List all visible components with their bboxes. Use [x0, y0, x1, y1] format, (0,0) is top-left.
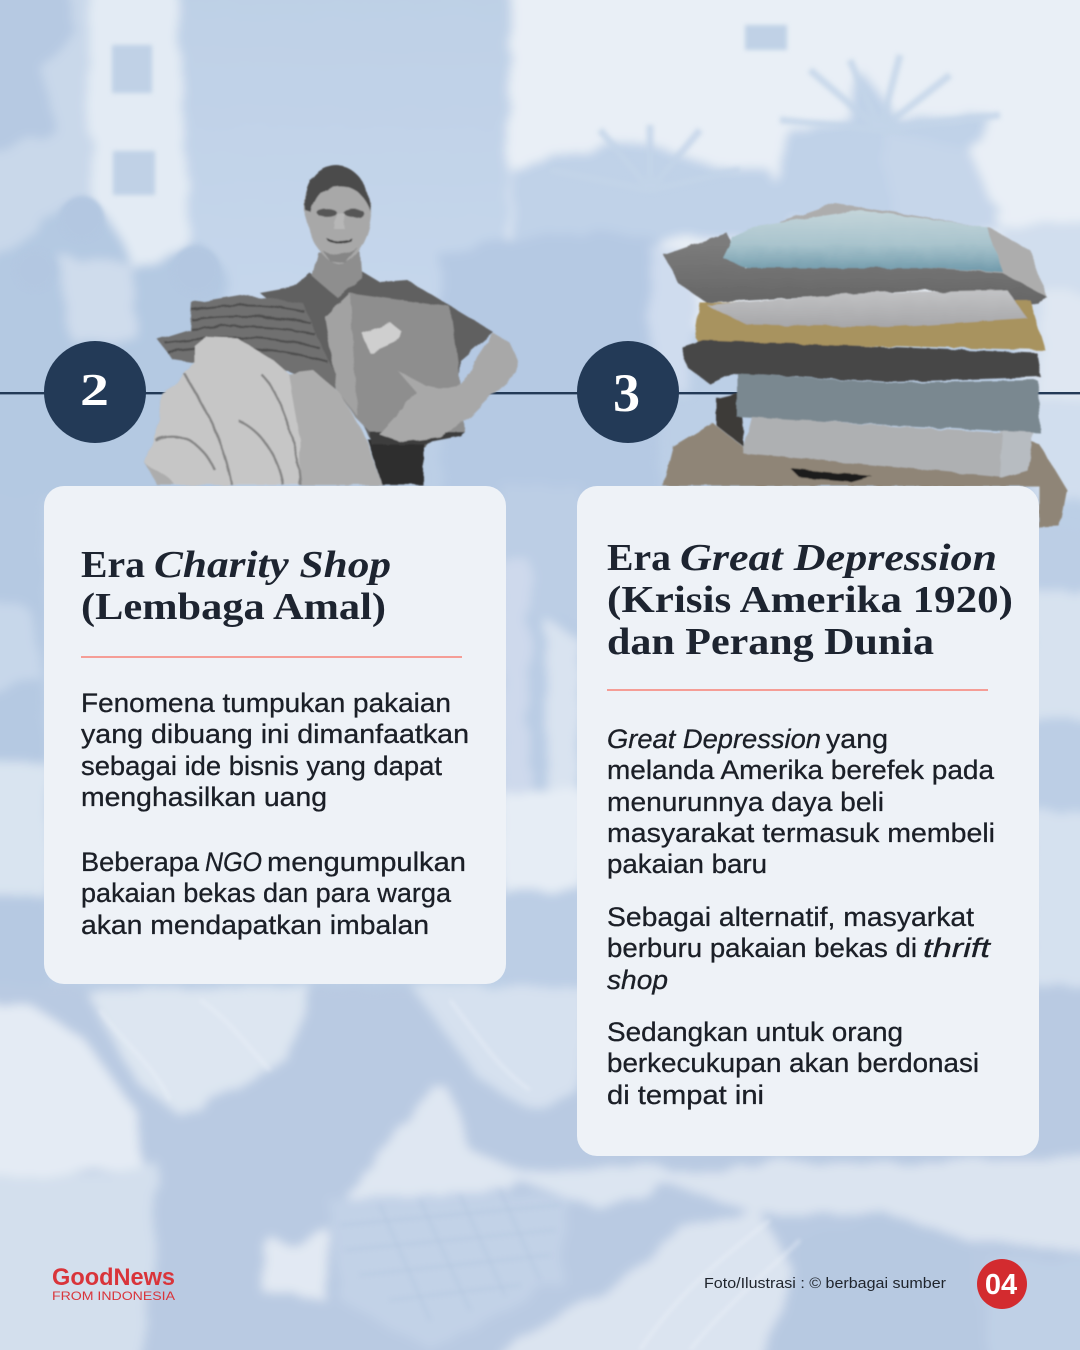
paragraph one: masyarakat termasuk membeli	[607, 818, 995, 848]
number badge 3: 3	[613, 363, 640, 423]
tan layer	[695, 300, 1045, 350]
paragraph two: Beberapa	[81, 847, 200, 877]
palm left	[0, 0, 75, 150]
blue-grey denim	[737, 373, 1040, 433]
heading: (Lembaga Amal)	[81, 586, 386, 628]
arm and hand	[380, 333, 518, 442]
photo: man holding a box and blankets	[145, 165, 518, 485]
paragraph two: Sebagai alternatif, masyarkat	[607, 902, 975, 932]
paragraph two: NGO	[205, 847, 262, 877]
paragraph one: yang	[826, 724, 888, 754]
paragraph one	[607, 724, 995, 879]
paragraph two	[81, 847, 466, 940]
paragraph three: berkecukupan akan berdonasi	[607, 1048, 979, 1078]
paragraph two: shop	[607, 965, 668, 995]
grey back fold	[780, 203, 1047, 298]
paragraph one: pakaian baru	[607, 849, 767, 879]
paragraph one: menurunnya daya beli	[607, 787, 884, 817]
middle strip	[500, 485, 580, 620]
lower shirt	[368, 440, 423, 485]
paragraph one	[81, 688, 469, 812]
pale denim	[743, 417, 1003, 477]
heading	[81, 544, 391, 628]
paragraph two: mengumpulkan	[267, 847, 466, 877]
box	[325, 293, 465, 432]
photo: stack of folded clothes	[663, 203, 1067, 528]
photo credit: Foto/Ilustrasi : © berbagai sumber	[704, 1275, 946, 1292]
crowd band	[0, 195, 225, 500]
logo: GoodNews from Indonesia: FROM INDONESIA	[52, 1289, 175, 1303]
timeline line	[0, 392, 1080, 394]
paragraph two	[607, 902, 992, 995]
page number badge	[977, 1259, 1027, 1309]
logo: GoodNews from Indonesia: GoodNews	[52, 1264, 175, 1291]
page number badge: 04	[985, 1269, 1017, 1301]
paragraph one: melanda Amerika berefek pada	[607, 755, 995, 785]
heading: Era	[607, 537, 671, 579]
number badge 3	[577, 341, 679, 443]
clothes field at bottom	[0, 985, 1080, 1350]
paragraph three	[607, 1017, 979, 1110]
right strip	[1030, 530, 1080, 590]
paragraph two: thrift	[923, 933, 992, 963]
paragraph three: di tempat ini	[607, 1080, 764, 1110]
heading: Era	[81, 544, 145, 586]
paragraph one: sebagai ide bisnis yang dapat	[81, 751, 442, 781]
heading: Charity Shop	[154, 544, 391, 586]
paragraph three: Sedangkan untuk orang	[607, 1017, 903, 1047]
woven hat	[158, 295, 337, 392]
charcoal layer	[682, 340, 1041, 384]
panel: Era Charity Shop	[44, 486, 506, 984]
quilted lattice	[340, 1190, 560, 1320]
teal sweater	[723, 210, 1003, 272]
head	[304, 165, 372, 264]
khaki trousers	[663, 423, 1067, 528]
neck	[312, 252, 362, 298]
paragraph one: menghasilkan uang	[81, 782, 327, 812]
dark grey tee	[664, 233, 1047, 305]
heading: dan Perang Dunia	[607, 621, 934, 663]
panel: Era Great Depression	[577, 486, 1039, 1156]
face features	[317, 209, 364, 263]
light grey layer	[707, 290, 1027, 327]
shirt and torso	[260, 270, 493, 485]
blanket	[145, 337, 382, 485]
paragraph one: Fenomena tumpukan pakaian	[81, 688, 451, 718]
left strip	[0, 490, 44, 765]
paragraph two: akan mendapatkan imbalan	[81, 910, 429, 940]
heading: Great Depression	[680, 537, 997, 579]
number badge 2: 2	[80, 364, 109, 415]
paragraph two: pakaian bekas dan para warga	[81, 878, 452, 908]
box label	[362, 322, 402, 353]
hair	[305, 165, 371, 212]
heading	[607, 537, 1013, 663]
sky and buildings	[0, 0, 190, 330]
heading: (Krisis Amerika 1920)	[607, 579, 1013, 621]
paragraph one: Great Depression	[607, 724, 821, 754]
number badge 2	[44, 341, 146, 443]
logo: GoodNews from Indonesia	[52, 1264, 175, 1303]
shadow and denim bits	[716, 392, 745, 448]
paragraph one: yang dibuang ini dimanfaatkan	[81, 719, 469, 749]
palms right	[770, 70, 1000, 250]
paragraph two: berburu pakaian bekas di	[607, 933, 917, 963]
